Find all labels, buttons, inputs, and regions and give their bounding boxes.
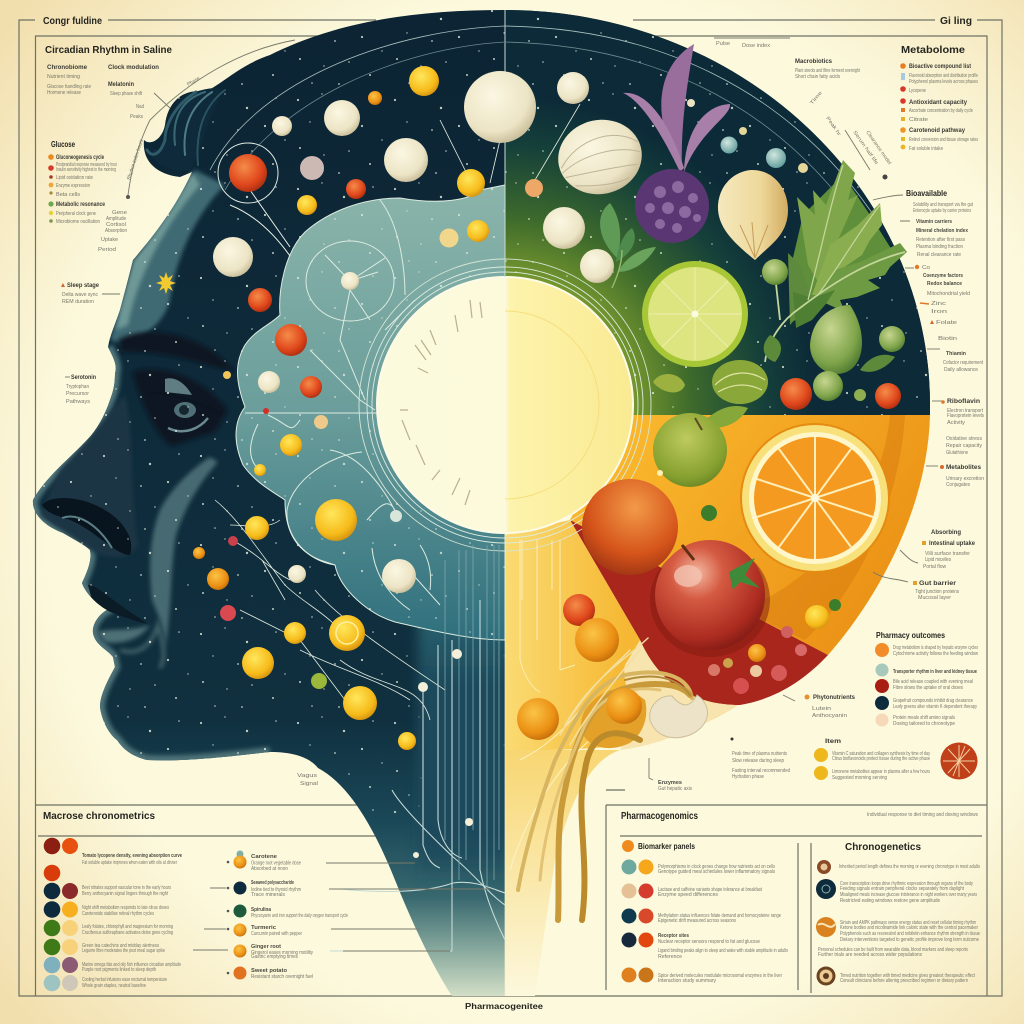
panel: center lower notes: Fasting interval recommended	[732, 768, 790, 774]
nose shading	[40, 395, 138, 557]
hair	[147, 88, 225, 170]
panel: absorption notes: Gut barrier	[919, 581, 957, 587]
panel: bioavailable list: Co	[922, 265, 930, 271]
orange wedge	[570, 415, 930, 655]
panel: pharmacogenomics column	[621, 811, 978, 984]
panel: absorption notes: Portal flow	[923, 564, 946, 570]
panel: pharmacogenomics column: Methylation status influences folate demand and homocysteine range	[658, 913, 781, 919]
swatch captions: Fat soluble uptake improves when eaten with oils at dinner	[82, 860, 177, 866]
onion	[718, 170, 788, 260]
panel: right edge notes: Thiamin	[946, 351, 966, 357]
panel: glucose legend: Gene	[112, 210, 127, 216]
center clock disc	[359, 259, 651, 551]
panel: pharmacy legend: Cytochrome activity follows the feeding window	[893, 651, 978, 657]
panel: top left circadian text	[45, 40, 295, 199]
face outline band	[33, 347, 270, 760]
panel: bottom-middle marker list: Gingerol eases morning motility	[251, 950, 313, 956]
panel: top right metabolome: Citrate	[909, 117, 928, 123]
big leaf	[765, 160, 907, 362]
panel: right edge notes: Flavoprotein levels	[947, 413, 984, 419]
lobe blob	[236, 185, 505, 640]
panel: top right metabolome: Clearance model	[864, 130, 892, 166]
nerve branches	[215, 500, 445, 720]
panel: item legend with citrus icon: Citrus bioflavonoids protect tissue during the active phase	[832, 756, 930, 762]
panel: red wedge note: Phytonutrients	[813, 695, 856, 701]
panel: item legend with citrus icon: Limonene metabolites appear in plasma after a few hours	[832, 769, 930, 775]
panel: right edge notes: Glutathione	[946, 450, 968, 456]
panel: bottom-middle marker list: Spirulina	[251, 907, 271, 913]
swatch captions: Purple root pigments linked to sleep depth	[82, 967, 156, 973]
heading: Metabolome	[901, 45, 965, 56]
panel: center lower notes: Slow release during sleep	[732, 758, 784, 764]
panel: pharmacy legend: Bile acid release coupled with evening meal	[893, 679, 973, 685]
heading: Pharmacy outcomes	[876, 631, 945, 640]
panel: top right metabolome: Flavonoid absorption and distribution profile	[909, 73, 978, 79]
side note: brow: Pathways	[66, 399, 91, 405]
panel: top left circadian text: Sleep phase shift	[110, 91, 143, 97]
mushroom and golden strands	[518, 638, 707, 920]
panel: right edge notes: Folate	[936, 320, 957, 326]
panel: top right metabolome: Serum half life	[851, 130, 879, 166]
panel: bottom-middle marker list: Curcumin paired with pepper	[251, 931, 302, 937]
panel: right edge notes: Electron transport	[947, 408, 984, 414]
heading: Circadian Rhythm in Saline	[45, 45, 172, 56]
orange slice	[740, 423, 890, 573]
heading: Pharmacogenomics	[621, 811, 698, 822]
panel: top right metabolome: Short chain fatty acids	[795, 74, 840, 80]
panel: glucose legend: Amplitude	[106, 216, 126, 222]
panel: chronogenetics column: Personal schedules can be built from wearable data, blood markers and sleep reports	[818, 947, 968, 953]
panel: glucose legend: Postprandial response measured by hour	[56, 162, 117, 168]
panel: pharmacogenomics column: Nuclear receptor sensors respond to fat and glucose	[658, 939, 760, 945]
small spheres	[525, 179, 543, 197]
panel: glucose legend: Microbiome oscillation	[56, 219, 100, 225]
panel: absorption notes: Absorbing	[931, 530, 961, 536]
neck note: Vagus	[297, 773, 318, 779]
panel: bottom-middle marker list: Absorbed at noon	[251, 866, 288, 872]
eyebrow and eye	[118, 332, 235, 372]
panel: brain lobes	[236, 185, 508, 885]
swatch captions: Whole grain staples, neutral baseline	[82, 983, 146, 989]
panel: bioavailable list: Mitochondrial yield	[927, 291, 970, 297]
peach fruit	[582, 479, 678, 575]
panel: bioavailable list: Redox balance	[927, 281, 962, 287]
panel: bottom-middle marker list: Sweet potato	[251, 968, 287, 974]
swatch captions: Tomato lycopene density, evening absorption curve	[82, 853, 182, 859]
panel: right edge notes: Repair capacity	[946, 443, 983, 449]
panel: chronogenetics column: Core transcription loops drive rhythmic expression through organs of the body	[840, 881, 973, 887]
neck column	[418, 600, 508, 885]
panel: pharmacogenomics column: Ligand binding peaks align to sleep and wake with stable amplitude in adults	[658, 948, 788, 954]
panel: bottom-middle marker list: Turmeric	[251, 925, 276, 931]
panel: top left circadian text: Hormone release	[47, 90, 81, 96]
panel: absorption notes: Intestinal uptake	[929, 541, 976, 547]
panel: bioavailable list: Plasma binding fraction	[916, 244, 963, 250]
panel: top left circadian text: Nad	[136, 104, 144, 110]
footer title: Pharmacogenitee	[465, 1002, 544, 1011]
panel: pharmacogenomics column: Spice derived molecules modulate microsomal enzymes in the liver	[658, 973, 782, 979]
yellow wedge	[505, 520, 738, 750]
side note: forehead: Sleep stage	[67, 283, 100, 289]
panel: bottom-middle marker list: Iodine tied to thyroid rhythm	[251, 887, 301, 893]
panel: pharmacy legend: Drug metabolism is shaped by hepatic enzyme cycles	[893, 645, 978, 651]
panel: center lower notes: Gut hepatic axis	[658, 786, 692, 792]
small fruits	[701, 505, 717, 521]
lobe contours	[245, 200, 440, 610]
panel: bioavailable list: Solubility and transport via the gut	[913, 202, 973, 208]
panel: bottom-middle marker list: Trace minerals	[251, 892, 286, 898]
panel: chronogenetics column: Inherited period length defines the morning or evening chronotype in most adults	[839, 864, 980, 870]
panel: macrose bottom-left palette	[43, 811, 182, 991]
panel: bioavailable list: Renal clearance rate	[917, 252, 961, 258]
panel: pharmacy legend: Dosing tailored to chronotype	[893, 721, 955, 727]
panel: chronogenetics column: Further trials are needed across wider populations	[818, 952, 922, 958]
neck circuit lines	[330, 600, 505, 951]
neck note: Signal	[300, 781, 318, 787]
panel: right edge notes: Biotin	[938, 336, 957, 342]
panel: top right metabolome: Plant sterols and fibre ferment overnight	[795, 68, 860, 74]
panel: bioavailable list: Enterocyte uptake by carrier proteins	[913, 208, 971, 214]
panel: chronogenetics column	[798, 842, 980, 993]
panel: center lower notes: Hydration phase	[732, 774, 764, 780]
panel: glucose legend: Insulin sensitivity highest in the morning	[56, 167, 116, 173]
panel: bioavailable list	[873, 189, 973, 315]
panel: top right metabolome: Ascorbate concentration by daily cycle	[909, 108, 973, 114]
panel: head silhouette	[30, 10, 510, 996]
panel: glucose legend: Metabolic resonance	[56, 202, 106, 208]
panel: chronogenetics column: Restricted eating windows restore gene amplitude	[840, 898, 940, 904]
swatch captions: Marine omega fats and oily fish influence circadian amplitude	[82, 962, 181, 968]
panel: pharmacogenomics column: Receptor sites	[658, 933, 689, 939]
cheek highlight	[150, 457, 218, 650]
lower foods	[517, 406, 890, 920]
left planets	[156, 66, 536, 858]
panel: chronogenetics column: Timed nutrition together with timed medicine gives greatest therapeutic effect	[840, 973, 975, 979]
tomato	[650, 540, 770, 657]
arc annotations	[714, 38, 870, 170]
panel: chronogenetics column: Consult clinicians before altering prescribed regimen or dietary pattern	[840, 978, 968, 984]
panel: top right metabolome: Antioxidant capacity	[909, 100, 968, 106]
panel: top left circadian text: Clock modulation	[108, 65, 159, 71]
panel: bioavailable list: Coenzyme factors	[923, 273, 963, 279]
side note: forehead	[61, 283, 120, 305]
panel: center lower notes: Peak time of plasma nutrients	[732, 751, 787, 757]
swatch captions: Leafy folates, chlorophyll and magnesium for morning	[82, 924, 173, 930]
panel: pharmacogenomics column: Reference	[658, 954, 682, 960]
panel: pharmacy legend	[875, 631, 978, 727]
side note: brow	[65, 375, 96, 405]
heading: Glucose	[51, 140, 75, 149]
panel: right edge notes: Conjugates	[946, 482, 970, 488]
swatch captions: Berry anthocyanin signal lingers through the night	[82, 891, 168, 897]
panel: center lower notes: Enzymes	[658, 780, 682, 786]
panel: right edge notes: Oxidative stress	[946, 436, 982, 442]
panel: center lower notes	[649, 738, 790, 792]
center axis and orbit lines	[210, 10, 880, 996]
panel: top left circadian text: Melatonin	[108, 82, 134, 88]
header label right: Gi ling	[940, 16, 972, 27]
panel: bottom-middle marker list: Gastric emptying times	[251, 954, 298, 960]
panel: absorption notes	[873, 530, 976, 601]
panel: glucose legend: Uptake	[101, 237, 118, 243]
stars	[30, 10, 510, 830]
panel: glucose legend: Beta cells	[56, 192, 81, 198]
panel: pharmacogenomics column: Lactase and caffeine variants shape tolerance at breakfast	[658, 887, 762, 893]
apple	[653, 406, 748, 487]
panel: bioavailable list: Vitamin carriers	[916, 219, 952, 225]
panel: pharmacogenomics column: Enzyme speed differences	[658, 892, 718, 898]
panel: bottom-middle marker list: Resistant starch overnight fuel	[251, 974, 313, 980]
panel: right edge notes: Urinary excretion	[946, 476, 984, 482]
colour swatches	[44, 838, 78, 991]
panel: bioavailable list: Zinc	[931, 301, 947, 307]
panel: top right metabolome: Polyphenol plasma levels across phases	[909, 79, 978, 85]
panel: bioavailable list: Retention after first pass	[916, 237, 965, 243]
striped nut	[551, 112, 649, 202]
heading: Bioavailable	[906, 189, 947, 198]
panel: bottom-middle marker list: Ginger root	[251, 944, 281, 950]
purple plant	[623, 44, 730, 172]
panel: bottom-middle marker list: Carotene	[251, 854, 277, 860]
panel: chronogenetics column: Ketone bodies and nicotinamide link caloric state with the central pacemaker	[840, 925, 978, 931]
panel: item legend with citrus icon	[814, 739, 978, 781]
panel: top right metabolome: Pulse	[716, 41, 730, 47]
swatch captions: Green tea catechins and midday alertness	[82, 943, 159, 949]
panel: chronogenetics column: Polyphenols such as resveratrol and nobiletin enhance rhythm strength in tissue	[840, 931, 980, 937]
panel: absorption notes: Tight junction proteins	[915, 589, 959, 595]
forehead highlight	[110, 170, 225, 345]
side note: forehead: REM duration	[62, 299, 94, 305]
panel: pharmacogenomics column: Interaction study summary	[658, 978, 716, 984]
panel: bioavailable list: Mineral chelation index	[916, 228, 968, 234]
panel: top right metabolome: Bioactive compound list	[909, 64, 971, 70]
panel: chronogenetics column: Sirtuin and AMPK pathways sense energy status and reset cellular timing rhythm	[840, 920, 976, 926]
panel: bottom-middle marker list: Orange root vegetable dose	[251, 860, 301, 866]
side note: forehead: Delta wave sync	[62, 292, 98, 298]
panel: top right metabolome: Dose index	[742, 43, 771, 49]
panel: top right metabolome: Lycopene	[909, 88, 926, 94]
red wedge	[570, 520, 828, 705]
panel: right edge notes: Cofactor requirement	[943, 360, 984, 366]
right foods upper	[525, 44, 907, 410]
swatch captions	[82, 853, 182, 989]
panel: top left circadian text: Peaks	[130, 114, 143, 120]
lobe stars	[236, 185, 505, 640]
swatch captions: Carotenoids stabilise retinal rhythm cycles	[82, 911, 154, 917]
panel: bioavailable list: Iron	[931, 309, 947, 315]
swatch captions: Night shift metabolism responds to late citrus doses	[82, 905, 169, 911]
panel: bottom-middle marker list: Phycocyanin and iron support the daily oxygen transport cycle	[251, 913, 348, 919]
panel: top right metabolome: Peak hr	[824, 116, 842, 138]
panel: top right metabolome: Time	[809, 90, 824, 106]
side note: brow: Precursor	[66, 391, 89, 397]
panel: chronogenetics column: Feeding signals entrain peripheral clocks separately from daylight	[840, 886, 965, 892]
panel: red wedge note: Anthocyanin	[812, 713, 847, 719]
panel: red wedge note: Lutein	[812, 706, 831, 712]
swatch captions: Legume fibre moderates the post meal sugar spike	[82, 948, 165, 954]
heading: Chronogenetics	[845, 842, 921, 853]
panel: pharmacogenomics column: Genotype guided meal schedules lower inflammatory signals	[658, 869, 775, 875]
sprig	[600, 203, 656, 288]
panel: glucose legend: Lipid oxidation rate	[56, 175, 93, 181]
panel: right edge notes: Daily allowance	[944, 367, 978, 373]
panel: top right metabolome: Carotenoid pathway	[909, 128, 966, 134]
panel: glucose legend: Absorption	[105, 228, 127, 234]
mouth	[88, 585, 150, 625]
panel: top right metabolome: Macrobiotics	[795, 59, 833, 65]
panel: glucose legend: Gluconeogenesis cycle	[56, 155, 104, 161]
side note: brow: Serotonin	[71, 375, 96, 381]
neck note	[297, 773, 318, 787]
panel: bottom-middle marker list: Seaweed polysaccharide	[251, 880, 294, 886]
panel: top left circadian text: Chronobiome	[47, 65, 88, 71]
panel: chronogenetics column: Dietary interventions targeted to genetic profile improve long term outcome	[840, 937, 979, 943]
panel: pharmacy legend: Leafy greens alter vitamin K dependent therapy	[893, 704, 977, 710]
berry	[635, 169, 709, 243]
cream sphere	[557, 72, 589, 104]
panel: glucose legend: Peripheral clock gene	[56, 211, 96, 217]
panel: glucose legend: Period	[98, 247, 116, 253]
panel: top left circadian text: Nutrient timing	[47, 74, 80, 80]
panel: bottom-middle marker list	[193, 850, 490, 980]
panel: glucose legend	[48, 140, 127, 253]
heading: Macrose chronometrics	[43, 811, 155, 822]
panel: right edge notes	[926, 320, 984, 488]
panel: item legend with citrus icon: Item	[825, 739, 841, 745]
swatch captions: Cruciferous sulforaphane activates detox gene cycling	[82, 930, 173, 936]
panel: absorption notes: Mucosal layer	[918, 595, 951, 601]
panel: item legend with citrus icon: Vitamin C saturation and collagen synthesis by time of day	[832, 751, 930, 757]
panel: top right metabolome: Retinol conversion and tissue storage rates	[909, 137, 978, 143]
panel: top right metabolome	[714, 38, 978, 180]
panel: chronogenetics column: Misaligned meals increase glucose intolerance in night workers over many years	[840, 892, 977, 898]
lime	[642, 261, 748, 367]
panel: absorption notes: Lipid micelles	[925, 557, 951, 563]
swatch captions: Cooling herbal infusions ease nocturnal temperature	[82, 977, 167, 983]
panel: pharmacy legend: Fibre slows the uptake of oral doses	[893, 685, 963, 691]
lower yellow fade	[505, 750, 620, 996]
panel: item legend with citrus icon: Suggested morning serving	[832, 775, 887, 781]
panel: glucose legend: Enzyme expression	[56, 183, 90, 189]
side note: brow: Tryptophan	[66, 384, 89, 390]
swatch captions: Beet nitrates support vascular tone in the early hours	[82, 885, 171, 891]
panel: pharmacogenomics column: Individual response to diet timing and dosing windows	[867, 812, 978, 818]
panel: right edge notes: Metabolites	[946, 465, 982, 471]
panel: red wedge note	[783, 694, 856, 719]
panel: glucose legend: Cortisol	[106, 222, 126, 228]
star icon	[156, 272, 176, 294]
panel: pharmacy legend: Protein meals shift amino signals	[893, 715, 955, 721]
panel: pharmacogenomics column: Epigenetic drift measured across seasons	[658, 918, 736, 924]
green fruits	[653, 259, 905, 410]
panel: pharmacy legend: Grapefruit compounds inhibit drug clearance	[893, 698, 973, 704]
panel: top left circadian text: Phase	[186, 75, 201, 88]
panel: pharmacy legend: Transporter rhythm in liver and kidney tissue	[893, 669, 977, 675]
panel: right half food wheel	[505, 10, 935, 996]
arc and pointer	[128, 40, 295, 195]
panel: right edge notes: Activity	[947, 420, 966, 426]
panel: absorption notes: Villi surface transfer	[925, 551, 970, 557]
panel: top right metabolome: Fat soluble intake	[909, 146, 943, 152]
panel: right edge notes: Riboflavin	[947, 399, 980, 405]
header label left: Congr fuldine	[43, 16, 102, 27]
ring around red planet	[218, 143, 278, 203]
panel: pharmacogenomics column: Polymorphisms in clock genes change how nutrients act on cells	[658, 864, 775, 870]
panel: pharmacogenomics column: Biomarker panels	[638, 842, 695, 851]
icon: citrus disc	[940, 742, 978, 780]
panel: top left circadian text: Glucose handling rate	[47, 84, 91, 90]
panel: top left circadian text: Rhythm index hours	[126, 138, 145, 181]
